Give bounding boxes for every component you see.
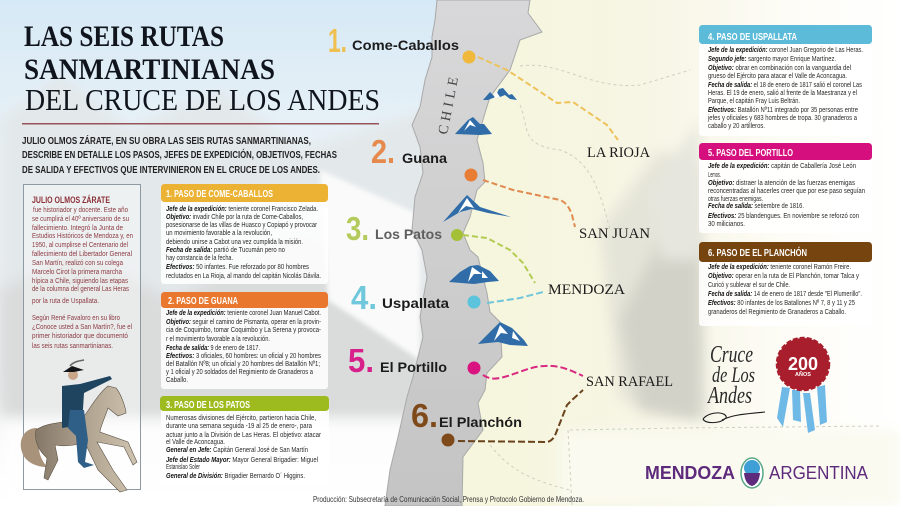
map label: Chile: CHILE	[436, 76, 462, 136]
route labels: El Planchón	[439, 414, 522, 430]
signature: Cruce de los Andes: de Los	[712, 362, 755, 387]
panel: Julio Olmos Zárate biography: se cumplirá el 40º aniversario de su	[32, 214, 129, 223]
panel 2: Paso de Guana: 2. PASO DE GUANA	[168, 295, 238, 307]
route labels: Uspallata	[382, 295, 449, 311]
route labels: 6.	[411, 397, 438, 434]
panel 3: Paso de Los Patos: 3. PASO DE LOS PATOS	[166, 399, 250, 411]
route 6: El Planchón	[442, 390, 583, 446]
title rule	[22, 123, 379, 124]
panel: Julio Olmos Zárate biography: ¿Conoce usted a San Martín?, fue el	[32, 322, 132, 331]
panel 2: Paso de Guana: Objetivo: seguir el camino de Pismanta, operar en la provin-	[166, 317, 321, 326]
panel: Julio Olmos Zárate biography	[24, 184, 140, 490]
panel 6: Paso de El Planchón	[699, 242, 872, 326]
signature: Cruce de los Andes	[703, 342, 765, 423]
panel: Julio Olmos Zárate biography: Marcelo Cirot la primera marcha	[32, 267, 123, 276]
panel 3: Paso de Los Patos: Estanislao Soler	[166, 462, 200, 471]
title: LAS SEIS RUTAS	[24, 20, 224, 53]
panel: Julio Olmos Zárate biography: Según René Favaloro en su libro	[32, 313, 120, 322]
panel 6: Paso de El Planchón: granaderos del Regimiento de Granaderos a Caballo.	[708, 307, 846, 316]
panel 6: Paso de El Planchón: Jefe de la expedición: teniente coronel Ramón Freire.	[708, 262, 851, 271]
panel 2: Paso de Guana: y 1 oficial y 20 soldados del Regimiento de Granaderos a	[166, 367, 314, 376]
map: Chile territory	[385, 0, 542, 506]
panel 3: Paso de Los Patos	[160, 396, 329, 486]
panel 3: Paso de Los Patos: Jefe del Estado Mayor: Mayor General Brigadier: Miguel	[166, 455, 318, 464]
panel: Julio Olmos Zárate biography: hípica a Chile, siguiendo las etapas	[32, 276, 128, 285]
signature: Cruce de los Andes: Andes	[706, 383, 752, 409]
panel 4: Paso de Uspallata: Efectivos: Batallón Nº11 integrado por 35 personas entre	[708, 105, 858, 114]
panel 1: Paso de Come-Caballos: posesionarse de las villas de Huasco y Copiapó y provocar	[166, 220, 317, 229]
city labels: MENDOZA	[548, 282, 625, 298]
panel 5: Paso del Portillo: Efectivos: 25 blandengues. En noviembre se reforzó con	[708, 211, 859, 220]
panel 5: Paso del Portillo: 30 milicianos.	[708, 219, 745, 228]
panel 1: Paso de Come-Caballos: Jefe de la expedición: teniente coronel Francisco Zelada.	[166, 204, 318, 213]
panel 4: Paso de Uspallata: Heras. El 19 de enero, salió al frente de la Maestranza y el	[708, 88, 857, 97]
panel 4: Paso de Uspallata: Jefe de la expedición: coronel Juan Gregorio de Las Heras.	[708, 45, 863, 54]
panel 3: Paso de Los Patos: General de División: Brigadier Bernardo O´ Higgins.	[166, 471, 305, 480]
route labels: 3.	[346, 210, 369, 247]
panel 2: Paso de Guana: del Batallón Nº8; un oficial y 20 hombres del Batallón Nº1;	[166, 359, 320, 368]
route 5: El Portillo	[468, 362, 583, 379]
intro text	[22, 134, 337, 176]
route 1: Come-Caballos	[462, 50, 618, 140]
panel 5: Paso del Portillo	[699, 143, 872, 233]
badge: 200 años: 200	[788, 354, 818, 374]
panel: Julio Olmos Zárate biography: fue historiador y docente. Este año	[33, 205, 128, 214]
panel 4: Paso de Uspallata	[699, 25, 872, 136]
panel 4: Paso de Uspallata: 4. PASO DE USPALLATA	[708, 31, 797, 43]
title: SANMARTINIANAS	[24, 53, 275, 86]
route 4: Uspallata	[468, 292, 543, 308]
panel 1: Paso de Come-Caballos: 1. PASO DE COME-CABALLOS	[166, 188, 273, 200]
city labels: SAN RAFAEL	[586, 374, 673, 390]
panel 3: Paso de Los Patos: el Valle de Aconcagua.	[166, 437, 225, 446]
panel 5: Paso del Portillo: Objetivo: distraer la atención de las fuerzas enemigas	[708, 178, 855, 187]
city labels	[548, 145, 673, 390]
route labels: Guana	[402, 150, 447, 166]
panel: Julio Olmos Zárate biography: fallecimiento del Libertador General	[32, 249, 132, 258]
panel 1: Paso de Come-Caballos: reclutados en La Rioja, al mando del capitán Nicolás Dávila.	[166, 271, 321, 280]
panel 1: Paso de Come-Caballos	[161, 184, 328, 284]
panel 1: Paso de Come-Caballos: Objetivo: invadir Chile por la ruta de Come-Caballos,	[166, 212, 303, 221]
panel 4: Paso de Uspallata: Fecha de salida: el 18 de enero de 1817 salió el coronel Las	[708, 80, 862, 89]
panel 2: Paso de Guana: Efectivos: 3 oficiales, 60 hombres: un oficial y 20 hombres	[166, 351, 321, 360]
intro text: JULIO OLMOS ZÁRATE, EN SU OBRA LAS SEIS RUTAS SANMARTINIANAS,	[22, 134, 311, 147]
panel: Julio Olmos Zárate biography: por la ruta de Uspallata.	[32, 296, 99, 305]
panel 1: Paso de Come-Caballos: Fecha de salida: partió de Tucumán pero no	[166, 245, 285, 254]
panel 5: Paso del Portillo: otras fuerzas enemigas.	[708, 194, 763, 203]
panel 4: Paso de Uspallata: caballo y 20 artilleros.	[708, 121, 765, 130]
city labels: LA RIOJA	[587, 145, 650, 161]
panel: Julio Olmos Zárate biography: San Martín, realizó con su colega	[32, 258, 124, 267]
title: DEL CRUCE DE LOS ANDES	[25, 82, 380, 117]
panel 3: Paso de Los Patos: actuar junto a la División de Las Heras. El objetivo: atacar	[166, 430, 321, 439]
panel: Julio Olmos Zárate biography: de la columna del general Las Heras	[32, 284, 129, 293]
badge: 200 años	[777, 338, 829, 433]
title	[24, 20, 380, 117]
panel 5: Paso del Portillo: 5. PASO DEL PORTILLO	[708, 147, 793, 159]
mountain icons	[443, 88, 528, 346]
panel 1: Paso de Come-Caballos: debiendo unirse a Cabot una vez cumplida la misión.	[166, 237, 303, 246]
route 3: Los Patos	[451, 229, 535, 283]
badge: 200 años: AÑOS	[795, 371, 811, 378]
panel 3: Paso de Los Patos: Numerosas divisiones del Ejército, partieron hacia Chile,	[166, 413, 316, 422]
panel 4: Paso de Uspallata: Parque, el capitán Fray Luis Beltrán.	[708, 96, 800, 105]
panel 4: Paso de Uspallata: Segundo jefe: sargento mayor Enrique Martínez.	[708, 54, 836, 63]
route labels: El Portillo	[380, 359, 447, 375]
panel 2: Paso de Guana: Caballo.	[166, 375, 188, 384]
panel 6: Paso de El Planchón: Efectivos: 80 infantes de los Batallones Nº 7, 8 y 11 y 25	[708, 298, 855, 307]
panel: Julio Olmos Zárate biography: Estudios Históricos de Mendoza y, en	[32, 231, 133, 240]
panel 2: Paso de Guana	[161, 292, 328, 389]
panel 3: Paso de Los Patos: durante una semana seguida -19 al 25 de enero-, para	[166, 421, 313, 430]
panel 2: Paso de Guana: Jefe de la expedición: teniente coronel Juan Manuel Cabot.	[166, 308, 321, 317]
signature: Cruce de los Andes: Cruce	[710, 342, 753, 368]
logo: Mendoza Argentina: ARGENTINA	[769, 463, 868, 483]
logo: Mendoza Argentina	[645, 458, 868, 488]
illustration: San Martín on horseback	[21, 360, 137, 492]
panel 4: Paso de Uspallata: jefes y oficiales y 683 hombres de tropa. 30 granaderos a	[707, 113, 858, 122]
panel 1: Paso de Come-Caballos: un movimiento favorable a la revolución,	[166, 228, 272, 237]
panel 5: Paso del Portillo: Fecha de salida: setiembre de 1816.	[708, 201, 804, 210]
city labels: SAN JUAN	[579, 226, 650, 242]
panel 4: Paso de Uspallata: Objetivo: obrar en combinación con la vanguardia del	[708, 63, 851, 72]
route labels: 1.	[328, 22, 347, 59]
panel 5: Paso del Portillo: Lemos.	[708, 170, 721, 179]
route labels: Los Patos	[375, 226, 442, 242]
panel 6: Paso de El Planchón: Fecha de salida: 14 de enero de 1817 desde "El Plumerillo".	[708, 289, 862, 298]
panel 6: Paso de El Planchón: 6. PASO DE EL PLANCHÓN	[708, 246, 807, 259]
panel 2: Paso de Guana: Fecha de salida: 9 de enero de 1817.	[166, 343, 260, 352]
panel 6: Paso de El Planchón: Curicó y sublevar el sur de Chile.	[708, 280, 790, 289]
panel 1: Paso de Come-Caballos: hay constancia de la fecha.	[166, 253, 233, 262]
route labels	[328, 22, 522, 434]
panel 1: Paso de Come-Caballos: Efectivos: 50 infantes. Fue reforzado por 80 hombres	[166, 262, 309, 271]
panel 3: Paso de Los Patos: General en Jefe: Capitán General José de San Martín	[166, 445, 308, 454]
source credit: Producción: Subsecretaría de Comunicación Social, Prensa y Protocolo Gobierno de Mendoza.	[313, 495, 584, 504]
panel: Julio Olmos Zárate biography: las seis rutas sanmartinianas.	[32, 341, 113, 350]
logo: Mendoza Argentina: MENDOZA	[645, 463, 735, 483]
route labels: Come-Caballos	[352, 37, 459, 53]
panel 4: Paso de Uspallata: grueso del Ejército para atacar el Valle de Aconcagua.	[708, 71, 847, 80]
panel 2: Paso de Guana: cia de Coquimbo, tomar Coquimbo y La Serena y provoca-	[166, 325, 321, 334]
panel 5: Paso del Portillo: Jefe de la expedición: capitán de Caballería José León	[708, 161, 856, 170]
panel: Julio Olmos Zárate biography: fallecimiento. Integró la Junta de	[32, 223, 123, 232]
route labels: 4.	[351, 279, 377, 316]
intro text: DESCRIBE EN DETALLE LOS PASOS, JEFES DE EXPEDICIÓN, OBJETIVOS, FECHAS	[22, 148, 337, 161]
route 2: Guana	[464, 168, 575, 227]
panel: Julio Olmos Zárate biography: primer historiador que documentó	[32, 331, 128, 340]
panel 6: Paso de El Planchón: Objetivo: operar en la ruta de El Planchón, tomar Talca y	[708, 271, 859, 280]
route labels: 5.	[348, 342, 374, 379]
panel 2: Paso de Guana: r el movimiento favorable a la revolución.	[166, 334, 270, 343]
panel: Julio Olmos Zárate biography: JULIO OLMOS ZÁRATE	[32, 195, 110, 205]
panel: Julio Olmos Zárate biography: 1950, al cumplirse el Centenario del	[32, 240, 128, 249]
intro text: DE SALIDA Y EFECTIVOS QUE INTERVINIERON EN EL CRUCE DE LOS ANDES.	[22, 164, 320, 176]
route labels: 2.	[371, 133, 395, 170]
